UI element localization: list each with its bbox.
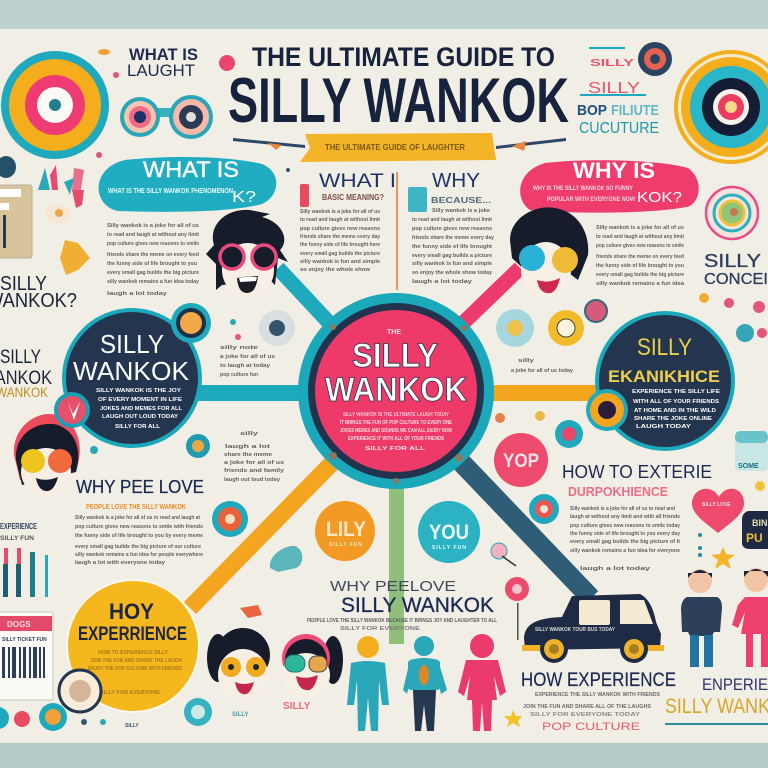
callout: why is: POPULAR WITH EVERYONE NOW (547, 197, 635, 203)
text: small note below left circle: laugh a lot (225, 444, 270, 450)
icon: yellow spiral badge (548, 310, 584, 346)
text: how to experience body: laugh at without any limit and with all friends (570, 514, 680, 520)
icons: footer row left: SILLY (232, 712, 248, 718)
icon: goggles (120, 95, 213, 139)
chart: small bars (0, 522, 48, 597)
chart: small bars: EXPERIENCE (0, 522, 37, 531)
heading and text: what column: every small gag builds the picture (300, 251, 380, 257)
person: teal with orange head (347, 636, 389, 731)
text: how to experience body: the funny side of life brought to you every day (570, 531, 681, 537)
callout: why is: WHY IS THE SILLY WANKOK SO FUNNY (533, 186, 633, 192)
heading and text: why column: to read and laugh at without limit (412, 217, 492, 223)
text: why people love body: pop culture gives new reasons to smile with friends (75, 524, 203, 530)
badge: orange lily: SILLY FUN (329, 542, 362, 548)
badge: teal sign right: SOME (738, 463, 759, 470)
icon: swirl (706, 187, 758, 239)
text: right body under why is (596, 225, 685, 287)
icon: orange leaf splash (60, 240, 90, 275)
text: why people love body: Silly wankok is a joke for all of us to read and laugh at (75, 515, 200, 521)
connector: orange to right circle (488, 385, 600, 401)
heading: experience silly wank (665, 675, 768, 725)
central hub: EXPERIENCE IT WITH ALL OF YOUR FRIENDS (348, 436, 445, 442)
heading and text: why column: Silly wankok is a joke (432, 208, 490, 214)
icon: small teal badge A (555, 420, 583, 448)
central hub: WANKOK (325, 371, 467, 409)
banner ribbon (300, 133, 496, 162)
heading: how experience: HOW EXPERIENCE (521, 670, 676, 691)
text: why people love body: the funny side of life brought to you by every meme (75, 533, 203, 539)
badge: teal you: YOU (429, 521, 469, 544)
text: left body under what is: Silly wankok is a joke for all of us (107, 223, 199, 229)
heading: how to experience: HOW TO EXTERIE (562, 462, 712, 482)
icon: pink figure sketch (38, 165, 84, 224)
text: right body under why is: every small gag builds the big picture (596, 272, 684, 278)
decorative rule with pin right (496, 138, 566, 151)
icon: navy blob top-left (0, 156, 16, 178)
text: small note right of hub: a joke for all of us today (511, 368, 574, 374)
person: pink woman right (732, 568, 768, 667)
heading: why people love silly wankok: SILLY FOR EVERYONE (340, 626, 421, 632)
person: pink (458, 634, 506, 731)
heading: what is laughter (127, 45, 198, 80)
heading and text: what column: the funny side of life brought here (300, 242, 380, 248)
callout: what is (99, 157, 276, 212)
text: left body under what is (107, 223, 200, 297)
badge: yellow circle icon (59, 670, 101, 712)
text: small note right of hub: silly (518, 358, 535, 364)
chart: small bars: SILLY FUN (0, 536, 34, 542)
badge: pink yop (494, 433, 548, 487)
badge: teal you (418, 501, 480, 563)
heading and text: why column: the funny side of life brought (412, 244, 492, 250)
icon: small badge mid (186, 434, 210, 458)
text: how to experience body: every small gag builds the big picture of it (570, 539, 680, 545)
heading and text: what column: friends share the meme every day (300, 234, 381, 240)
heading and text: why column: friends share the meme every day (412, 235, 495, 241)
panel: right navy circle (595, 311, 735, 451)
heading: why people love: PEOPLE LOVE THE SILLY WANKOK (86, 504, 186, 511)
badge: teal you: SILLY FUN (432, 545, 466, 551)
text: small note centre-left: to laugh at today (220, 363, 271, 369)
panel: left navy circle: SILLY FOR ALL (115, 424, 160, 430)
divider orange (396, 172, 398, 290)
text: left body under what is: laugh a lot today (107, 291, 168, 297)
heading: what is laughter: LAUGHT (127, 61, 195, 80)
heading: how to experience: DURPOKHIENCE (568, 484, 668, 499)
text: small note below left circle: laugh out loud today (224, 477, 281, 483)
panel: yellow experience circle: JOIN THE FUN AND SHARE THE LAUGH (90, 658, 182, 664)
heading and text: what column (300, 171, 396, 273)
heading and text: what column: silly wankok is fun and simple (300, 259, 380, 265)
heading: how experience (521, 670, 676, 733)
panel: yellow experience circle: HOY (109, 599, 154, 624)
text: how to experience body: silly wankok remains a fun idea for everyone (570, 548, 680, 554)
panel: yellow experience circle: HOW TO EXPERIENCE SILLY (98, 650, 169, 656)
text: how to experience body (570, 506, 681, 572)
heading: how experience: EXPERIENCE THE SILLY WANKOK WITH FRIENDS (535, 692, 661, 698)
panel: right navy circle: EKANIKHICE (608, 367, 720, 386)
heading: silly concept: SILLY (704, 251, 761, 271)
callout: why is: WHY IS (573, 158, 655, 183)
panel: yellow experience circle: ENJOY THE POP CULTURE WITH FRIENDS (88, 666, 183, 672)
title: SILLY WANKOK (228, 66, 569, 136)
text: left body under what is: every small gag builds the big picture (107, 270, 199, 276)
text: why people love body: silly wankok remains a fun idea for people everywhere (75, 552, 203, 558)
panel: barcode ticket (0, 612, 53, 700)
person: navy man right (681, 569, 722, 667)
central hub: IT BRINGS THE FUN OF POP CULTURE TO EVERY ONE (340, 420, 453, 426)
heading: why people love: WHY PEE LOVE (76, 477, 204, 497)
title (228, 42, 569, 136)
heading: silly concept: CONCEI (704, 271, 768, 288)
text: right body under why is: to read and laugh at without any limit (596, 234, 684, 240)
heading: how experience: SILLY FOR EVERYONE TODAY (530, 712, 641, 718)
icon: heart: SILLY LOVE (702, 502, 731, 508)
badge: bin pop dark (742, 511, 768, 549)
connector: teal to left circle (195, 385, 300, 401)
text: right body under why is: Silly wankok is a joke for all of us (596, 225, 684, 231)
heading and text: why column: silly wankok is fun and simple (412, 261, 492, 267)
text: small note below left circle: friends and family (224, 468, 285, 474)
icon: small star bottom (504, 710, 522, 727)
heading: how experience: JOIN THE FUN AND SHARE ALL OF THE LAUGHS (523, 704, 652, 710)
heading: why people love (76, 477, 204, 511)
small blob orange (98, 49, 110, 55)
heading and text: why column: WHY (432, 170, 480, 192)
heading: silly wankok question left: SILLY (0, 273, 47, 295)
heading: why people love silly wankok: SILLY WANKOK (341, 594, 494, 617)
badge: orange lily: LILY (326, 518, 366, 541)
text: small note centre-left: pop culture fun (220, 372, 259, 378)
text: left body under what is: the funny side of life brought to you (107, 261, 197, 267)
badge: pink yop: YOP (503, 451, 539, 472)
panel: right navy circle: SILLY (637, 334, 692, 361)
icons: footer row left: SILLY (283, 701, 311, 712)
heading and text: what column: WHAT I (319, 171, 396, 192)
icon: pink dot badge (505, 577, 529, 640)
badge: orange lily (315, 501, 375, 561)
heading and text: why column: laugh a lot today (412, 279, 473, 285)
heading and text: what column: Silly wankok is a joke for all of us (300, 209, 380, 215)
panel: barcode ticket: DOGS (7, 620, 31, 629)
icon: pink flower on stem (491, 543, 516, 566)
badge: left orange (171, 303, 211, 343)
icons: footer row left (0, 698, 311, 731)
callout: why is (520, 158, 699, 213)
heading: why people love silly wankok (307, 578, 497, 632)
heading block: pop culture (577, 47, 659, 137)
text: why people love body: laugh a lot with everyone today (75, 560, 166, 566)
central hub (298, 293, 494, 489)
small pin pink (219, 55, 235, 71)
central hub: JOKES MEMES AND SOUNDS WE CAN ALL ENJOY NOW (340, 428, 452, 434)
text: small note below left circle (224, 431, 285, 483)
icon: teal snail (270, 546, 302, 572)
text: left body under what is: friends share the meme on every feed (107, 252, 199, 258)
panel: barcode ticket: SILLY TICKET FUN (2, 637, 47, 643)
heading: silly wankok left edge: SILLY (0, 347, 41, 368)
panel: left navy circle: JOKES AND MEMES FOR ALL (100, 406, 182, 412)
connector: pink to top-right face (460, 268, 520, 326)
text: small note centre-left (220, 345, 275, 378)
heading and text: what column: pop culture gives new reasons (300, 226, 380, 232)
text: how to experience body: Silly wankok is a joke for all of us to read and (570, 506, 675, 512)
icon: small teal badge B (529, 494, 559, 524)
heading: how to experience (562, 462, 712, 499)
heading: silly wankok left edge (0, 347, 52, 400)
central hub: THE (387, 329, 401, 336)
decorative rule with pin left (233, 138, 305, 150)
icon: small illustrated badge top middle (259, 310, 295, 346)
text: small note centre-left: silly note (220, 345, 258, 351)
heading block: pop culture: CUCUTURE (579, 120, 659, 137)
banner ribbon: THE ULTIMATE GUIDE OF LAUGHTER (325, 143, 465, 152)
heading block: pop culture: SILLY (588, 80, 640, 97)
icon: confetti bird (240, 605, 262, 618)
text: how to experience body: laugh a lot today (580, 566, 651, 572)
heading: what is laughter: WHAT IS (129, 45, 198, 64)
heading block: pop culture: SILLY (590, 58, 635, 69)
panel: right navy circle: WITH ALL OF YOUR FRIENDS (633, 399, 720, 405)
panel: right navy circle: LAUGH TODAY (636, 424, 692, 430)
icon: pink small badge top (585, 300, 607, 322)
icon: poster card left (0, 185, 32, 258)
text: small note below left circle: share the meme (224, 452, 272, 458)
person: teal and navy (403, 636, 447, 731)
panel: left navy circle: OF EVERY MOMENT IN LIFE (98, 397, 183, 403)
panel: right navy circle: SHARE THE JOKE ONLINE (634, 416, 713, 422)
panel: left navy circle: WANKOK (73, 356, 190, 386)
heading: how experience: POP CULTURE (542, 721, 640, 733)
text: left body under what is: to read and laugh at without any limit (107, 232, 199, 238)
badge: right orange (586, 389, 628, 431)
text: why people love body: every small gag builds the big picture of our culture (75, 544, 201, 550)
callout: why is: KOK? (637, 189, 682, 206)
badge: bin pop dark: PU (746, 531, 763, 545)
face: two girls (207, 628, 343, 701)
text: how to experience body: pop culture gives new reasons to smile today (570, 523, 681, 529)
callout: what is: WHAT IS THE SILLY WANKOK PHENOMENON (108, 188, 233, 195)
panel: yellow experience circle: EXPERRIENCE (78, 624, 187, 645)
heading: silly concept (704, 251, 768, 288)
heading and text: what column: BASIC MEANING? (322, 193, 384, 202)
icon: target small left (212, 501, 248, 537)
panel: left navy circle: SILLY WANKOK IS THE JOY (96, 388, 182, 394)
text: small note right of hub (511, 358, 574, 374)
text: left body under what is: silly wankok remains a fun idea today (107, 279, 200, 285)
icons: footer row left: SILLY (125, 723, 139, 729)
callout: what is: WHAT IS (143, 157, 239, 182)
panel: left navy circle: SILLY (100, 329, 164, 359)
face: top-right cartoon (510, 207, 588, 298)
central hub: SILLY WANKOK IS THE ULTIMATE LAUGH TODAY (343, 412, 450, 418)
text: right body under why is: friends share the meme on every feed (596, 254, 684, 260)
text: small note centre-left: a joke for all of us (220, 354, 275, 360)
panel: right navy circle: AT HOME AND IN THE WILD (634, 408, 716, 414)
icon: teal illustrated badge (496, 309, 534, 347)
badge: bin pop dark: BIN (752, 518, 768, 528)
face: left cartoon (14, 414, 80, 496)
panel: yellow experience circle (67, 580, 199, 712)
text: right body under why is: pop culture gives new reasons to smile (596, 243, 684, 249)
heading and text: why column: BECAUSE... (431, 196, 491, 205)
text: small note below left circle: a joke for all of us (224, 460, 284, 466)
heading: why people love silly wankok: PEOPLE LOVE THE SILLY WANKOK BECAUSE IT BRINGS JOY AND LAUGHTER TO ALL (307, 618, 497, 624)
heading and text: why column (408, 170, 495, 285)
icon: top-left target (1, 51, 109, 159)
heading: why people love silly wankok: WHY PEELOVE (330, 578, 456, 595)
central hub: SILLY FOR ALL (365, 446, 425, 452)
icon: gear badge (638, 42, 672, 76)
text: why people love body (75, 515, 203, 566)
callout: what is: K? (232, 189, 256, 206)
heading: silly wankok question left (0, 273, 77, 312)
text: small note below left circle: silly (240, 431, 260, 437)
connector: green vertical (389, 480, 404, 644)
heading and text: why column: so enjoy the whole show today (412, 270, 493, 276)
heading and text: what column: so enjoy the whole show (300, 267, 371, 273)
heading and text: what column: to read and laugh at without limit (300, 217, 380, 223)
van: SILLY WANKOK TOUR BUS TODAY (535, 627, 616, 633)
face: top-left cartoon (206, 210, 288, 297)
badge: left pink (54, 392, 90, 428)
heading block: pop culture: BOP (577, 102, 607, 119)
small blob red (113, 72, 119, 78)
panel: yellow experience circle: SILLY FOR EVERYONE (100, 690, 161, 696)
text: right body under why is: silly wankok remains a fun idea (596, 281, 685, 287)
icon: star bottom right (711, 547, 735, 569)
icon: top-right target (674, 50, 768, 164)
van (522, 594, 664, 663)
panel: right navy circle: EXPERIENCE THE SILLY LIFE (632, 389, 721, 395)
connector: teal to top-left face (278, 268, 334, 328)
central hub: SILLY (352, 337, 438, 375)
icon: heart (692, 489, 744, 533)
text: left body under what is: pop culture gives new reasons to smile (107, 241, 199, 247)
connector: orange diagonal (190, 463, 332, 608)
badge: teal sign right (735, 431, 768, 471)
heading block: pop culture: FILIUTE (611, 102, 659, 119)
heading and text: why column: pop culture gives new reasons (412, 226, 492, 232)
icon: confetti dots (90, 152, 767, 557)
connector: navy diagonal (459, 460, 591, 598)
heading and text: why column: every small gag builds a picture (412, 253, 492, 259)
panel: left navy circle (62, 308, 202, 448)
title: THE ULTIMATE GUIDE TO (252, 42, 555, 72)
text: right body under why is: the funny side of life brought to you (596, 263, 684, 269)
panel: left navy circle: LAUGH OUT LOUD TODAY (102, 414, 179, 420)
